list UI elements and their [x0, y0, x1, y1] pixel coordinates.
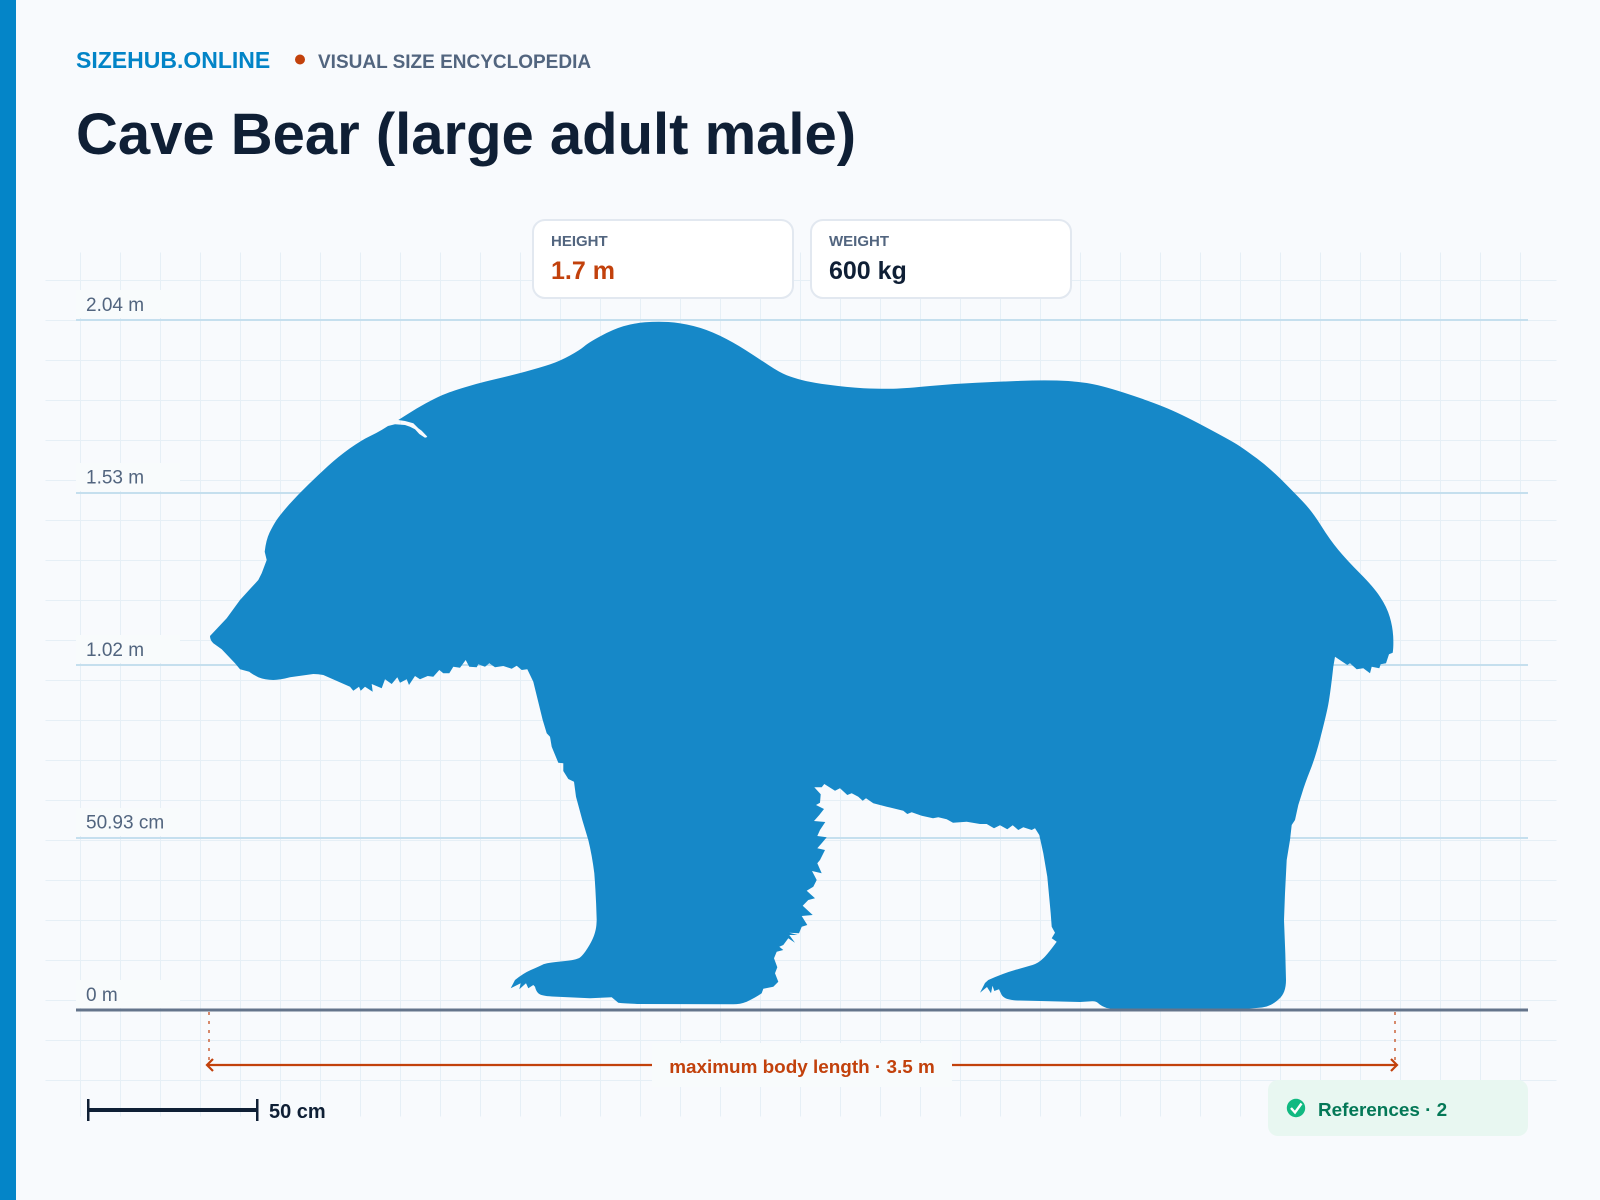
header brand line [76, 47, 591, 73]
brand name: SIZEHUB.ONLINE [76, 47, 270, 73]
arrow right [952, 1059, 1397, 1071]
brand dot [295, 54, 305, 64]
stat card: weight: WEIGHT [829, 233, 889, 250]
stat card: height: HEIGHT [551, 233, 608, 250]
axis label: 1.53 m: 1.53 m [86, 468, 144, 488]
axis label: 1.53 m [76, 463, 180, 491]
axis label: 50.93 cm: 50.93 cm [86, 812, 164, 834]
axis label: 0 m: 0 m [86, 985, 118, 1006]
icon: check [1287, 1099, 1305, 1117]
accent bar [0, 0, 16, 1200]
dimension label: maximum body length · 3.5 m [669, 1057, 935, 1078]
references badge: References · 2 [1318, 1100, 1447, 1121]
axis label: 0 m [76, 980, 180, 1008]
tagline: VISUAL SIZE ENCYCLOPEDIA [318, 52, 591, 73]
scale bar [87, 1099, 326, 1123]
axis label: 1.02 m [76, 635, 180, 663]
title: Cave Bear (large adult male) [76, 102, 856, 167]
axis label: 1.02 m: 1.02 m [86, 640, 144, 661]
silhouette: cave bear [210, 322, 1393, 1009]
stat card: weight: 600 kg [829, 257, 907, 285]
references badge [1268, 1080, 1528, 1136]
axis label: 2.04 m: 2.04 m [86, 295, 144, 316]
height reference lines [76, 319, 1528, 839]
dimension: maximum body length [207, 1012, 1397, 1087]
ground line [76, 1008, 1528, 1012]
scale bar: 50 cm [269, 1101, 326, 1123]
arrow left [207, 1059, 652, 1071]
axis label: 50.93 cm [76, 808, 180, 836]
stat card: height [533, 220, 793, 298]
axis label: 2.04 m [76, 290, 180, 318]
stat card: height: 1.7 m [551, 257, 615, 285]
stat card: weight [811, 220, 1071, 298]
